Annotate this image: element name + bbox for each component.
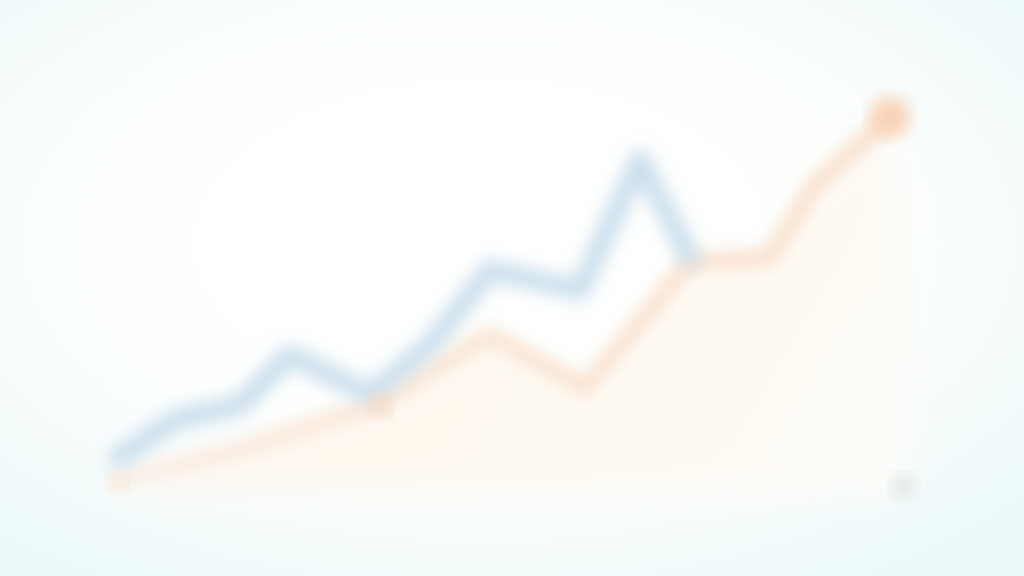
area under orange line	[118, 125, 905, 492]
faint title smudge	[310, 38, 575, 46]
orange junction marker	[369, 394, 391, 416]
orange start marker	[109, 473, 127, 491]
orange line	[118, 118, 890, 480]
blue line	[118, 160, 690, 458]
orange end marker	[870, 97, 910, 137]
small grey mark	[892, 475, 916, 499]
